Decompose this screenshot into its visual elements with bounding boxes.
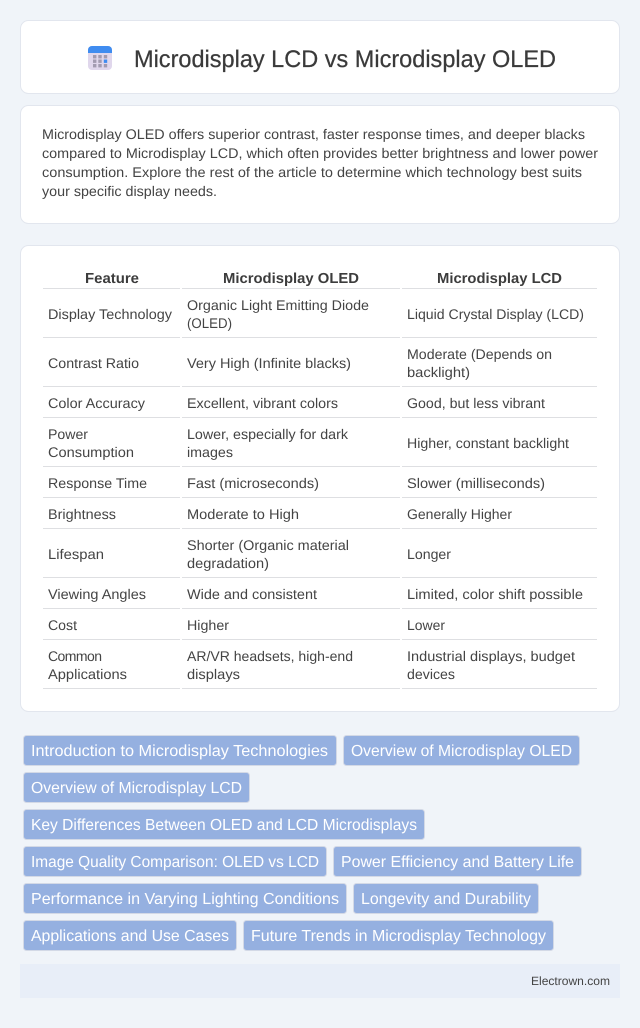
tag: longevity [354, 884, 538, 914]
panel: introduction [20, 106, 620, 224]
row: power consumption: Power [48, 426, 88, 442]
row: brightness: Moderate to High [187, 506, 299, 522]
tag: image quality [24, 846, 326, 876]
row: color accuracy: Color Accuracy [48, 395, 145, 411]
row: lifespan [48, 537, 451, 571]
tag: lighting conditions: Performance in Varying Lighting Conditions [31, 891, 339, 908]
row: cost [48, 617, 445, 633]
row: color accuracy: Good, but less vibrant [407, 395, 545, 411]
row: brightness [48, 506, 512, 522]
tag: power efficiency [334, 846, 582, 876]
row: power consumption: Lower, especially for dark [187, 426, 349, 442]
row: brightness: Generally Higher [407, 506, 512, 522]
row: response time: Slower (milliseconds) [407, 475, 545, 491]
intro text: consumption. Explore the rest of the article to determine which technology best suits [42, 164, 582, 180]
row: response time: Response Time [48, 475, 147, 491]
row: cost: Lower [407, 617, 445, 633]
row: power consumption: Higher, constant backlight [407, 435, 569, 451]
intro text [42, 126, 598, 199]
panel: comparison table [20, 246, 620, 712]
row: contrast ratio: Very High (Infinite blacks) [187, 355, 351, 371]
table header: Feature [85, 271, 139, 287]
row: color accuracy [48, 395, 545, 411]
title: Microdisplay LCD vs Microdisplay OLED [134, 46, 556, 73]
row: power consumption: images [187, 444, 233, 460]
row: display technology: Display Technology [48, 306, 172, 322]
row: common applications: devices [407, 666, 455, 682]
row: common applications: displays [187, 666, 240, 682]
table header: Microdisplay LCD [437, 271, 562, 287]
row: power consumption: Consumption [48, 444, 134, 460]
row: viewing angles: Viewing Angles [48, 586, 146, 602]
row: color accuracy: Excellent, vibrant colors [187, 395, 338, 411]
table header [85, 271, 562, 287]
row: cost: Higher [187, 617, 229, 633]
tag: overview LCD [24, 772, 250, 802]
row: cost: Cost [48, 617, 77, 633]
row: common applications: Applications [48, 666, 127, 682]
row: display technology: (OLED) [187, 315, 232, 331]
row: brightness: Brightness [48, 506, 116, 522]
tag: introduction [24, 736, 336, 766]
row: display technology: Liquid Crystal Display (LCD) [407, 306, 584, 322]
row: display technology [48, 297, 584, 331]
tag: applications [24, 920, 236, 950]
topic tags [24, 736, 582, 950]
intro text: Microdisplay OLED offers superior contrast, faster response times, and deeper blacks [42, 126, 585, 142]
row: contrast ratio: backlight) [407, 364, 470, 380]
header panel [20, 20, 620, 94]
row: lifespan: Lifespan [48, 546, 104, 562]
tag: overview OLED: Overview of Microdisplay OLED [351, 743, 572, 760]
tag: lighting conditions [24, 884, 346, 914]
footer credit: Electrown.com [531, 974, 610, 988]
tag: key differences: Key Differences Between OLED and LCD Microdisplays [31, 817, 417, 834]
row: power consumption [48, 426, 569, 460]
tag: overview LCD: Overview of Microdisplay LCD [31, 780, 242, 797]
row: lifespan: Shorter (Organic material [187, 537, 349, 553]
tag: key differences [24, 810, 424, 840]
tag: future trends [244, 920, 554, 950]
row: contrast ratio: Contrast Ratio [48, 355, 139, 371]
tag: introduction: Introduction to Microdisplay Technologies [31, 743, 328, 760]
tag: overview OLED [344, 736, 580, 766]
footer [20, 964, 620, 998]
tag: longevity: Longevity and Durability [361, 891, 531, 908]
tag: future trends: Future Trends in Microdisplay Technology [251, 928, 546, 945]
row: viewing angles: Limited, color shift possible [407, 586, 583, 602]
tag: power efficiency: Power Efficiency and Battery Life [341, 854, 574, 871]
tag: applications: Applications and Use Cases [31, 928, 229, 945]
row: response time: Fast (microseconds) [187, 475, 319, 491]
row: contrast ratio [48, 346, 552, 380]
intro text: your specific display needs. [42, 183, 217, 199]
row: viewing angles: Wide and consistent [187, 586, 317, 602]
table header: Microdisplay OLED [223, 271, 359, 287]
row: lifespan: degradation) [187, 555, 269, 571]
row: viewing angles [48, 586, 583, 602]
tag: image quality: Image Quality Comparison: OLED vs LCD [31, 854, 319, 871]
row: response time [48, 475, 545, 491]
row: common applications: AR/VR headsets, high-end [187, 648, 353, 664]
row: lifespan: Longer [407, 546, 451, 562]
row: common applications: Common [48, 648, 102, 664]
row: contrast ratio: Moderate (Depends on [407, 346, 552, 362]
row: common applications: Industrial displays, budget [407, 648, 575, 664]
row: common applications [48, 648, 575, 682]
icon: calendar grid [88, 46, 112, 70]
intro text: compared to Microdisplay LCD, which often provides better brightness and lower power [42, 145, 598, 161]
row: display technology: Organic Light Emitting Diode [187, 297, 369, 313]
